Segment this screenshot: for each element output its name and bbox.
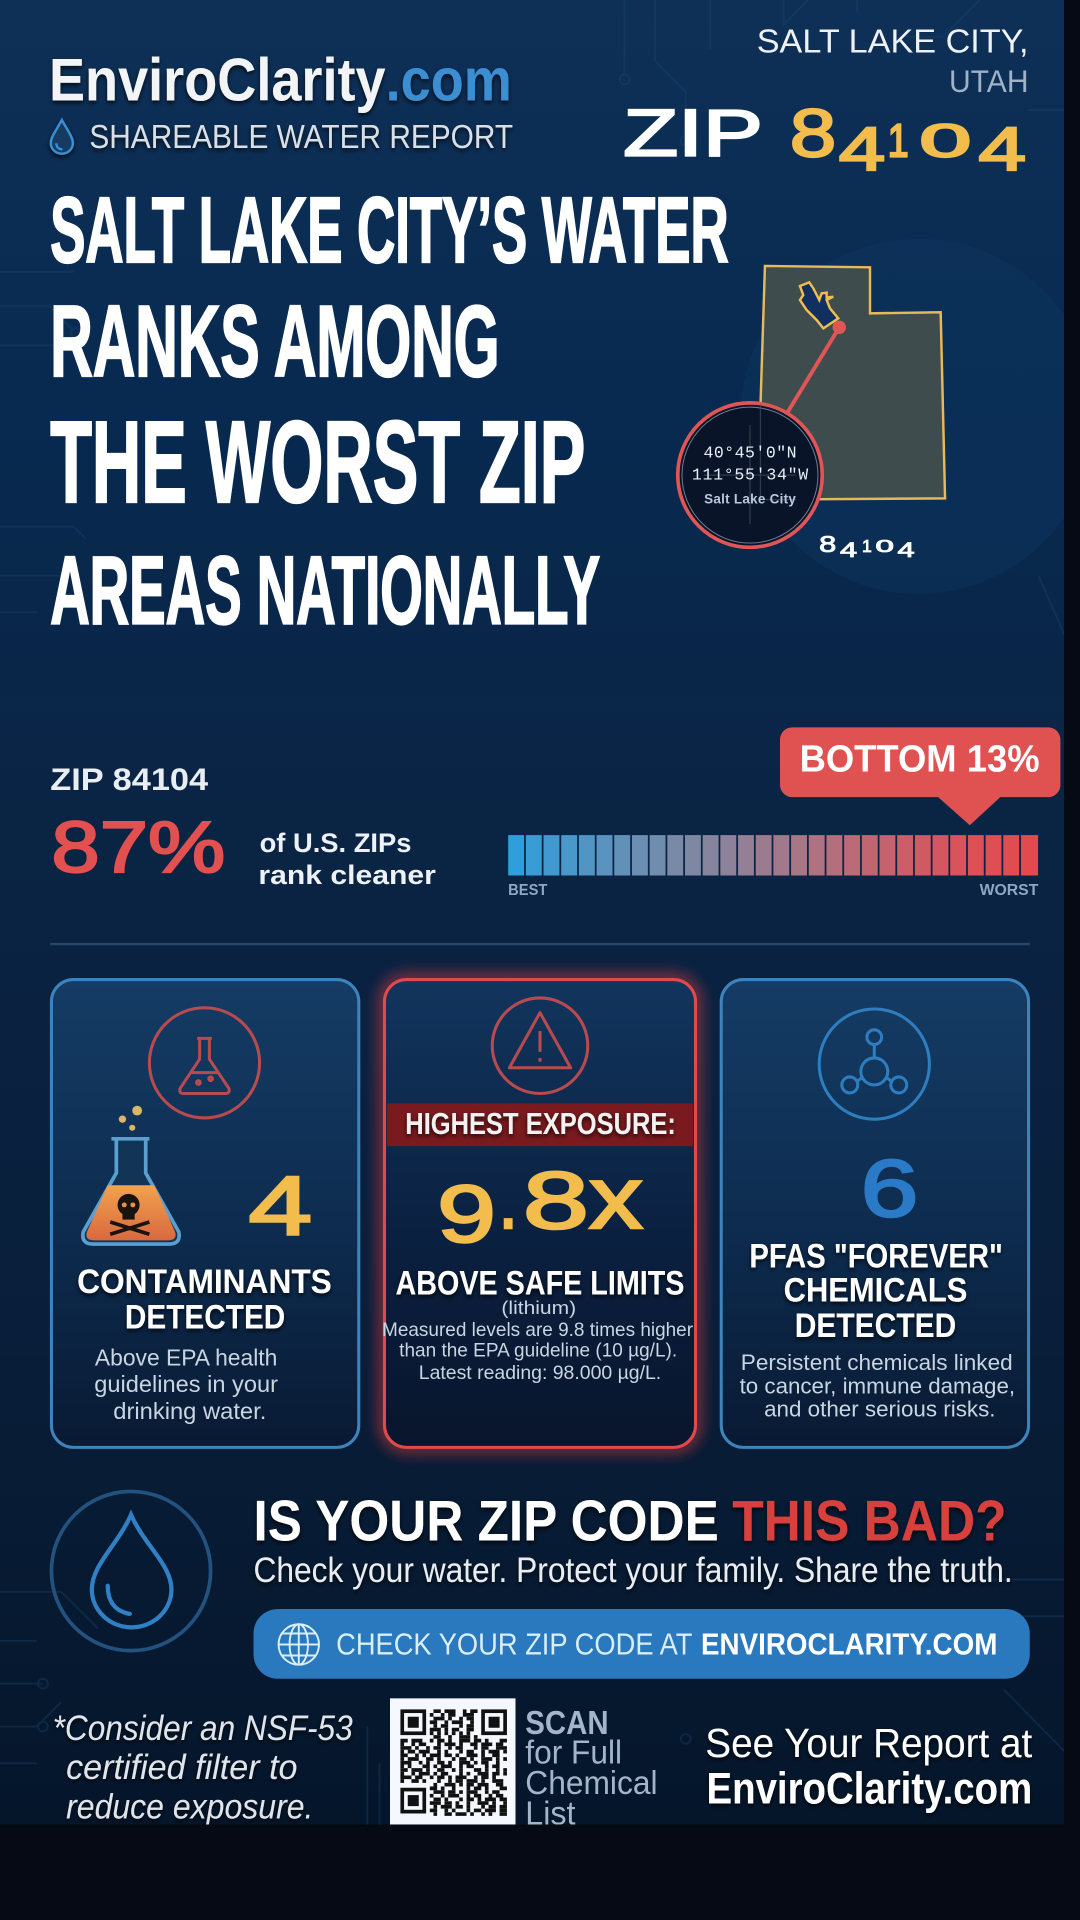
icon: globe [279,1624,319,1665]
headline: AREAS NATIONALLY [50,536,600,644]
stat: 9.8x: 8 [523,1156,589,1246]
map zip label: 4 [898,539,915,562]
state: UTAH [949,63,1029,99]
callout: bottom 13 percent: BOTTOM 13% [800,738,1040,780]
card body: drinking water. [113,1398,266,1424]
button: ENVIROCLARITY.COM [701,1627,997,1661]
stat: 4: 4 [249,1159,312,1252]
callout: bottom 13 percent [780,727,1060,825]
stat: 9.8x: . [498,1156,518,1246]
city: SALT LAKE CITY, [757,24,1029,61]
scan caption: List [525,1795,576,1832]
icon: large water drop [51,1491,211,1651]
card heading: CONTAMINANTS [77,1263,332,1301]
rank caption: of U.S. ZIPs [260,828,411,858]
card heading: PFAS "FOREVER" [749,1237,1003,1275]
filter note: *Consider an NSF-53 [53,1708,353,1748]
coordinates badge [678,403,822,547]
card body [94,1344,278,1424]
coordinates badge: 111°55′34″W [692,465,808,484]
tagline: SHAREABLE WATER REPORT [89,119,513,156]
card heading: ABOVE SAFE LIMITS [396,1264,684,1302]
card heading: DETECTED [125,1299,285,1337]
card heading: DETECTED [795,1307,956,1345]
panel: PFAS [721,980,1029,1447]
map zip label: 1 [862,536,872,556]
scan caption: Chemical [525,1765,658,1802]
call to action subline: Check your water. Protect your family. Share the truth. [253,1550,1013,1590]
map zip label: 8 [819,531,836,557]
stat: 6: 6 [861,1144,918,1234]
call to action heading: THIS BAD? [732,1489,1007,1553]
panel: contaminants [51,980,359,1447]
icon: small flask [149,1008,260,1118]
gauge bar: BEST [508,882,548,899]
scan caption: SCAN [525,1705,609,1742]
headline [50,178,729,644]
map zip label: 0 [876,536,894,556]
card body: to cancer, immune damage, [740,1373,1015,1398]
stat: 9.8x: x [589,1148,643,1247]
icon: water drop [51,120,73,154]
pin dot [833,321,846,334]
report link: EnviroClarity.com [707,1765,1032,1814]
card body: Persistent chemicals linked [741,1350,1013,1375]
card body [740,1350,1015,1422]
button [253,1609,1030,1679]
card body: (lithium) [501,1297,576,1318]
ranking: percent block [50,761,437,890]
card body: Above EPA health [95,1344,277,1370]
gauge bar [508,835,1039,899]
card body: than the EPA guideline (10 µg/L). [399,1340,677,1362]
coordinates badge: 40°45′0″N [703,443,797,462]
card heading [749,1237,1003,1345]
Great Salt Lake [800,282,838,328]
filter note: reduce exposure. [66,1786,313,1826]
zip number: 1 [888,115,909,167]
card heading [77,1263,332,1337]
card body: and other serious risks. [764,1397,996,1422]
pin line [787,327,839,413]
scan caption [525,1705,658,1832]
zip label: ZIP [623,97,763,171]
icon: warning triangle [492,998,588,1093]
headline: RANKS AMONG [50,284,500,398]
87 percent: 87% [51,808,225,888]
card body: guidelines in your [94,1371,278,1397]
map zip label: 4 [840,539,857,562]
card body [382,1297,694,1384]
stat: 9.8x: 9 [437,1170,496,1260]
zip number: 0 [920,115,971,167]
zip number: 8 [790,97,836,172]
map: Utah with location pin [678,266,945,562]
zip number: 4 [978,115,1026,183]
filter note: certified filter to [66,1747,298,1787]
gauge bar: WORST [980,882,1039,899]
report link [705,1720,1032,1814]
report link: See Your Report at [705,1720,1032,1766]
ranking: percent block: rank cleaner [258,860,437,890]
zip label: ZIP 84104 [50,761,208,797]
scan caption: for Full [525,1734,622,1771]
logo [49,46,513,156]
card heading: CHEMICALS [784,1272,967,1310]
filter note [53,1708,353,1826]
banner [387,1103,693,1146]
headline: THE WORST ZIP [50,397,585,527]
call to action heading [253,1489,1007,1553]
state outline [760,266,945,500]
location header [623,24,1029,183]
zip number: 4 [839,115,885,183]
icon: poison flask [83,1106,179,1244]
card body: Latest reading: 98.000 µg/L. [419,1362,661,1384]
icon: molecule [819,1009,929,1119]
brand name: EnviroClarity.com [49,46,512,113]
card body: Measured levels are 9.8 times higher [382,1319,694,1341]
call to action heading: IS YOUR ZIP CODE [253,1489,719,1553]
coordinates badge: Salt Lake City [704,491,796,506]
button: CHECK YOUR ZIP CODE AT [336,1627,692,1661]
QR code [390,1698,516,1824]
banner text: HIGHEST EXPOSURE: [405,1107,676,1141]
panel: highest exposure [382,980,696,1447]
